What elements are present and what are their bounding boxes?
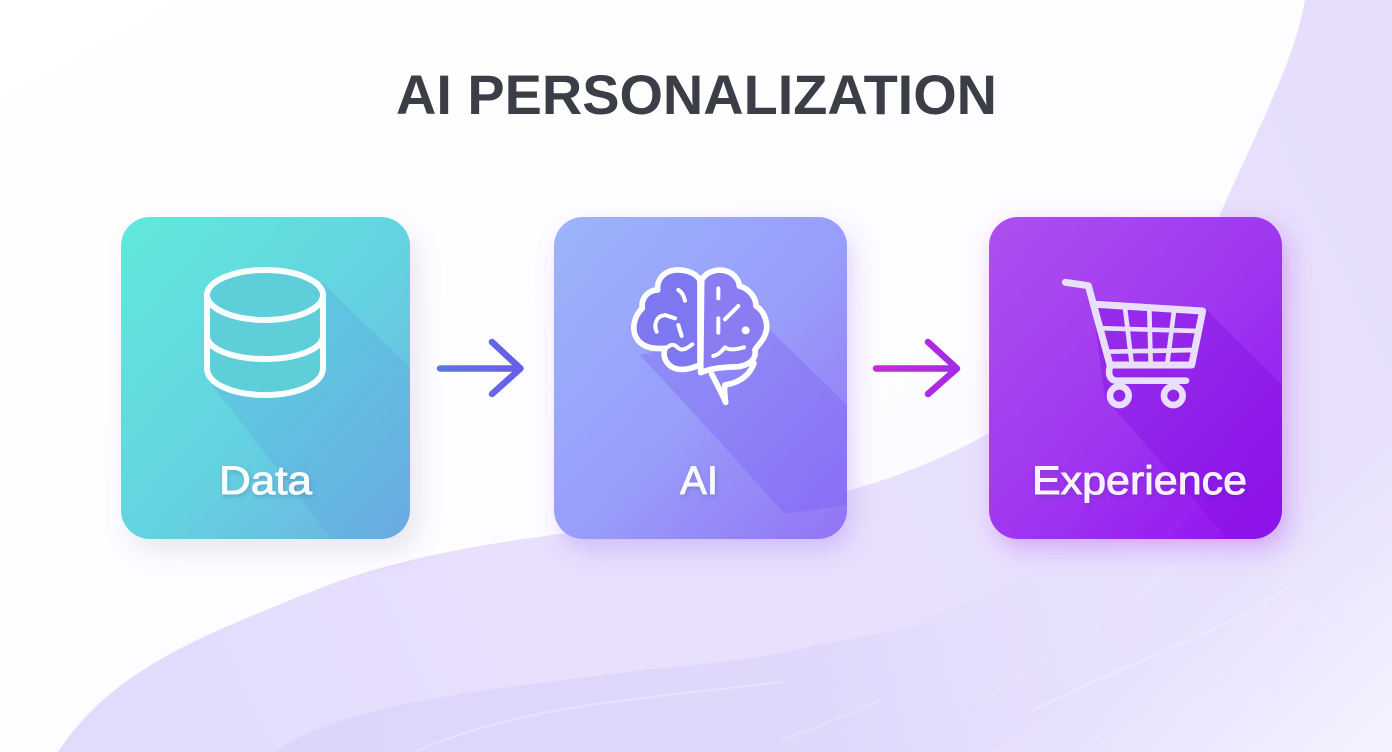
card background (989, 217, 1282, 539)
icon: database (207, 270, 323, 395)
arrow: data to AI (440, 342, 520, 394)
panel: AI (554, 217, 847, 539)
long shadow (1092, 300, 1282, 539)
background wave (275, 420, 1392, 752)
left hemisphere fill and outline (634, 270, 700, 369)
icon tint (207, 270, 323, 395)
card background (121, 217, 410, 539)
handle and frame (1065, 282, 1203, 365)
cylinder strokes (207, 270, 323, 395)
label: AI (680, 459, 718, 503)
icon: brain (634, 270, 767, 402)
brain stem (712, 363, 754, 402)
long shadow (640, 325, 847, 514)
card background (554, 217, 847, 539)
panel: Data (121, 217, 410, 539)
arrow: AI to experience (876, 342, 957, 394)
cart base (1109, 367, 1186, 381)
bottom-right highlight (1040, 420, 1392, 752)
label: Data (219, 459, 313, 503)
panel: Experience (989, 217, 1282, 539)
label: Experience (1032, 459, 1247, 503)
basket grid (1103, 308, 1198, 363)
long shadow (212, 282, 410, 539)
right hemisphere fill and outline (701, 270, 767, 373)
wheels (1110, 386, 1129, 405)
title: AI PERSONALIZATION (396, 63, 997, 126)
light streaks (417, 560, 1392, 751)
right folds (718, 288, 738, 333)
icon: shopping cart (1065, 282, 1203, 405)
left folds (678, 290, 685, 301)
